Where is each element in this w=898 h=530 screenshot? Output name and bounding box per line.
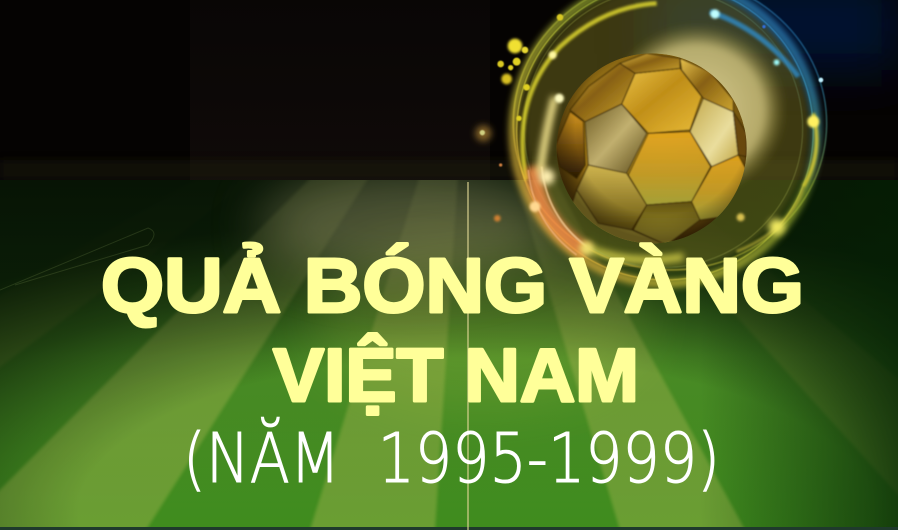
ball panels xyxy=(555,53,748,245)
inner disc tint xyxy=(523,0,810,272)
sparkles xyxy=(475,9,823,255)
glow haze behind ball xyxy=(607,23,787,197)
dark stadium background xyxy=(0,0,898,182)
halfway line xyxy=(467,182,469,530)
upper pitch haze xyxy=(260,170,560,280)
title xyxy=(101,242,804,499)
subtitle years: (NĂM 1995-1999) xyxy=(183,416,720,499)
light rings xyxy=(513,0,827,283)
ball xyxy=(555,53,748,245)
football pitch with mown stripes xyxy=(0,180,898,530)
title line 2: VIỆT NAM xyxy=(273,333,639,417)
stripes seen through the dim upper pitch xyxy=(0,180,741,527)
penalty arc xyxy=(0,228,154,290)
title line 1: QUẢ BÓNG VÀNG xyxy=(101,242,804,329)
golden ball with light rings xyxy=(475,0,827,283)
